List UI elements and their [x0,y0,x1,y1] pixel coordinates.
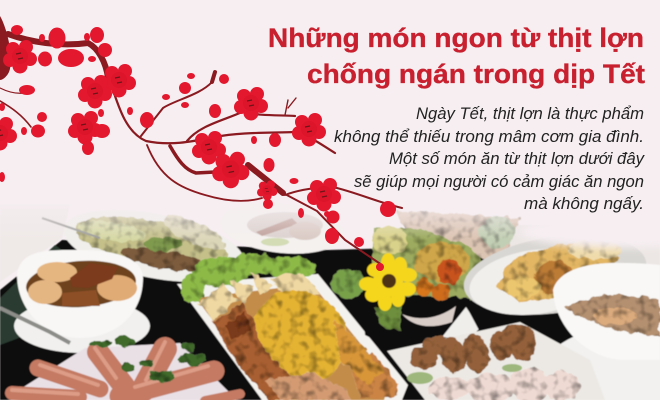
faded salad behind flowers [395,210,520,262]
faded white tablecloth left [0,205,70,282]
rice [235,273,365,399]
faded top table right [470,225,660,300]
lettuce [181,253,317,303]
spoon [0,308,70,343]
roast meat [212,303,400,400]
flower arrangement [331,226,495,350]
soup bowl with braised pork and eggs [17,250,143,338]
intro text: Một số món ăn từ thịt lợn dưới đây [389,149,645,168]
branches [0,16,402,265]
intro text: mà không ngấy. [524,194,644,213]
petals [0,25,396,271]
food base on platter [196,284,390,400]
parsley [89,336,206,382]
rectangular platter [177,253,408,400]
title: chống ngán trong dịp Tết [307,59,645,89]
title: Những món ngon từ thịt lợn [268,23,644,53]
plate: salad [58,197,250,295]
plate: sliced meat top [218,197,346,259]
white plate wedge behind vase [442,307,480,340]
plate: fried food [459,225,651,332]
blossoms [3,40,37,74]
white fade over the top of the food [0,190,660,240]
title [268,23,645,89]
saucer under soup bowl [14,299,150,353]
intro text: không thể thiếu trong mâm cơm gia đình. [334,127,644,146]
intro text: sẽ giúp mọi người có cảm giác ăn ngon [354,172,644,191]
intro text [334,104,645,213]
green placemat left [0,245,75,345]
dark table [0,240,660,400]
intro text: Ngày Tết, thịt lợn là thực phẩm [416,104,644,123]
plate: meat rolls [387,322,605,400]
food photo [0,197,660,400]
fork on salad plate [42,218,100,238]
plum blossom branch [0,16,402,271]
soup bowl right with saucer [543,263,660,400]
sausage plate [18,343,232,400]
sausages [12,342,240,400]
soft white haze at top right [520,216,660,248]
bread [198,272,320,320]
